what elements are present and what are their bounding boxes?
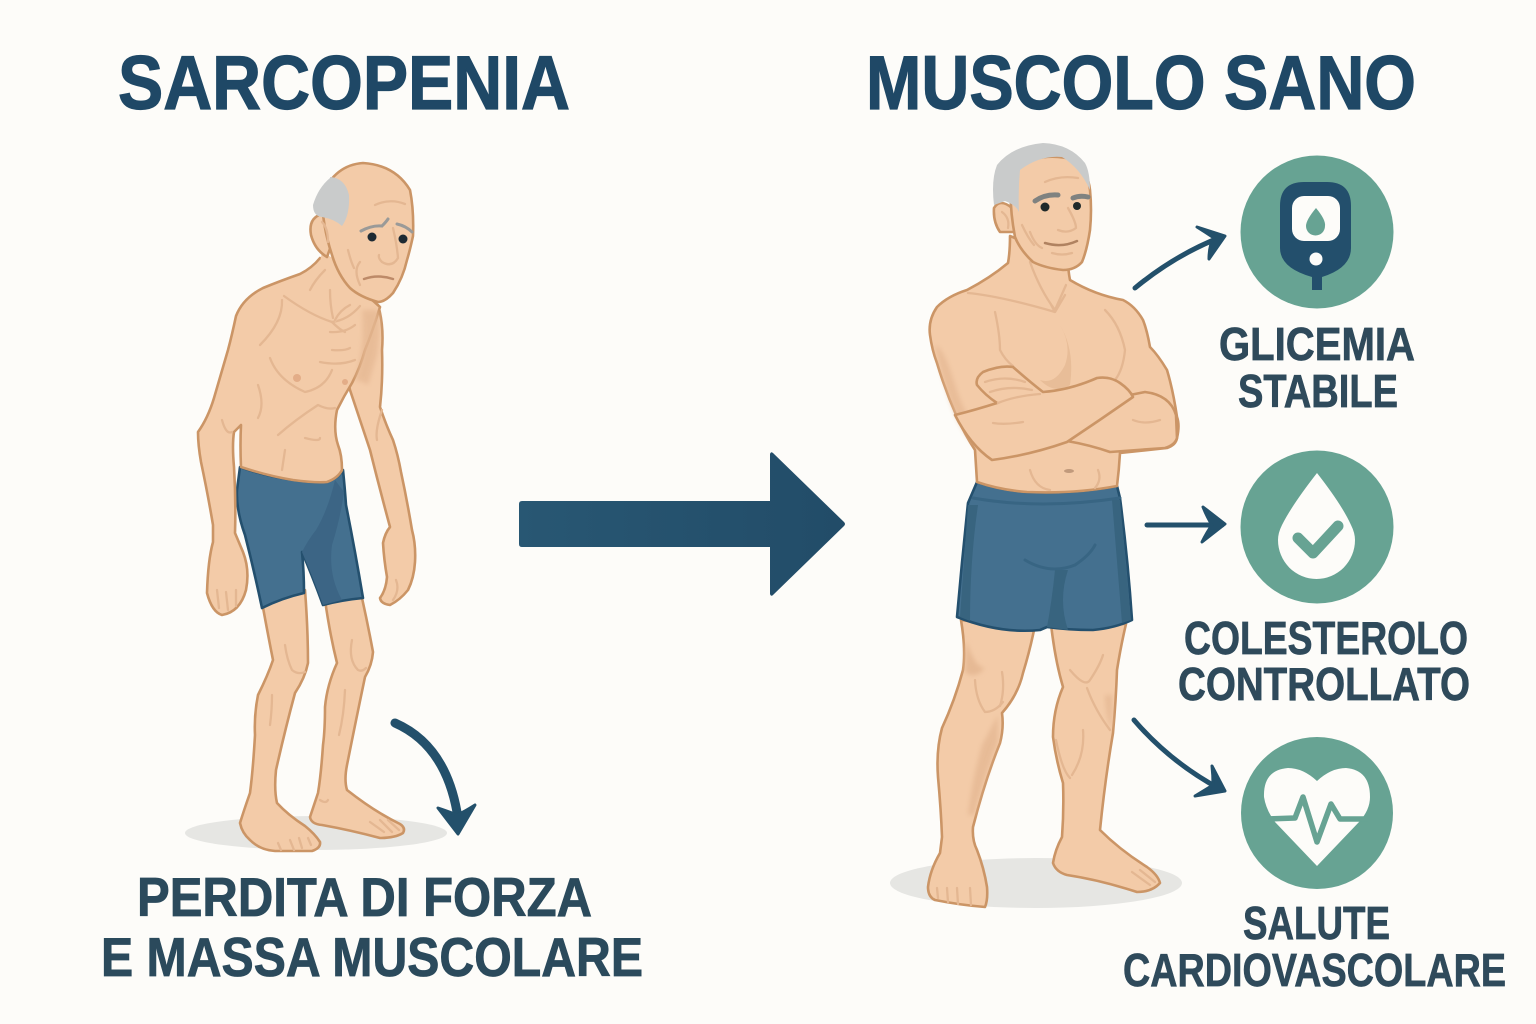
label: glicemia stabile: GLICEMIA xyxy=(1219,318,1415,370)
shorts xyxy=(237,467,363,608)
figure: healthy older man xyxy=(890,143,1182,908)
shorts xyxy=(957,482,1132,631)
label: glicemia stabile xyxy=(1219,318,1415,417)
neck xyxy=(1012,240,1066,310)
chest muscle lines xyxy=(968,270,1125,490)
crossed arms xyxy=(955,367,1177,460)
shorts shading xyxy=(302,480,344,605)
head xyxy=(993,143,1091,310)
label: salute cardiovascolare: SALUTE xyxy=(1243,897,1390,949)
ground shadow xyxy=(185,816,447,850)
figure: elderly man with sarcopenia xyxy=(185,163,447,851)
arrow: downward curved decline xyxy=(395,723,475,834)
label: colesterolo controllato: CONTROLLATO xyxy=(1178,658,1470,710)
leg: front leg xyxy=(240,590,320,851)
arrow: to cholesterol icon xyxy=(1147,507,1225,542)
torso shading xyxy=(935,345,975,445)
hand fingers xyxy=(217,580,397,610)
neck xyxy=(318,252,368,322)
icon: glucometer xyxy=(1240,156,1394,308)
finger lines xyxy=(985,378,1040,403)
title: sarcopenia: SARCOPENIA xyxy=(118,41,570,126)
leg shading and muscle lines xyxy=(937,640,1155,905)
face xyxy=(1011,157,1091,270)
leg: left leg xyxy=(928,620,1034,907)
eyes and brows xyxy=(1035,195,1088,212)
head xyxy=(310,163,413,302)
leg details xyxy=(270,640,399,850)
far forearm xyxy=(1067,392,1177,452)
nose, mouth and wrinkles xyxy=(322,201,405,285)
nose, mouth and wrinkles xyxy=(1002,177,1078,254)
shorts waistband and folds xyxy=(960,498,1131,630)
arrow: to glycemia icon xyxy=(1135,227,1225,288)
label: salute cardiovascolare xyxy=(1123,897,1506,996)
ear xyxy=(994,203,1018,232)
front arm xyxy=(340,305,415,605)
large arrow: transition to healthy muscle xyxy=(519,452,845,596)
torso shading xyxy=(355,310,379,385)
hair xyxy=(313,177,349,226)
label: glicemia stabile: STABILE xyxy=(1238,365,1398,417)
icon: drop with check xyxy=(1240,450,1394,604)
arrow: to heart icon xyxy=(1134,720,1225,796)
torso xyxy=(930,236,1178,492)
ear xyxy=(310,214,336,257)
back arm and torso xyxy=(198,258,380,615)
near forearm and hand xyxy=(955,367,1133,460)
leg: right leg xyxy=(1051,624,1160,892)
icon: heart with pulse xyxy=(1241,737,1393,889)
caption: perdita di forza xyxy=(101,866,643,988)
title: muscolo sano: MUSCOLO SANO xyxy=(866,41,1416,126)
hair xyxy=(993,143,1090,212)
face and skull xyxy=(322,163,413,302)
neck tendons xyxy=(310,270,350,320)
label: colesterolo controllato xyxy=(1178,612,1470,710)
eyes and brows xyxy=(361,219,412,244)
neck lines xyxy=(1030,262,1066,310)
ground shadow xyxy=(890,858,1182,908)
caption: perdita di forza: E MASSA MUSCOLARE xyxy=(101,926,643,988)
label: colesterolo controllato: COLESTEROLO xyxy=(1184,612,1468,664)
caption: perdita di forza: PERDITA DI FORZA xyxy=(137,866,592,928)
leg: back leg xyxy=(310,598,404,838)
ribs and chest lines xyxy=(222,296,382,470)
